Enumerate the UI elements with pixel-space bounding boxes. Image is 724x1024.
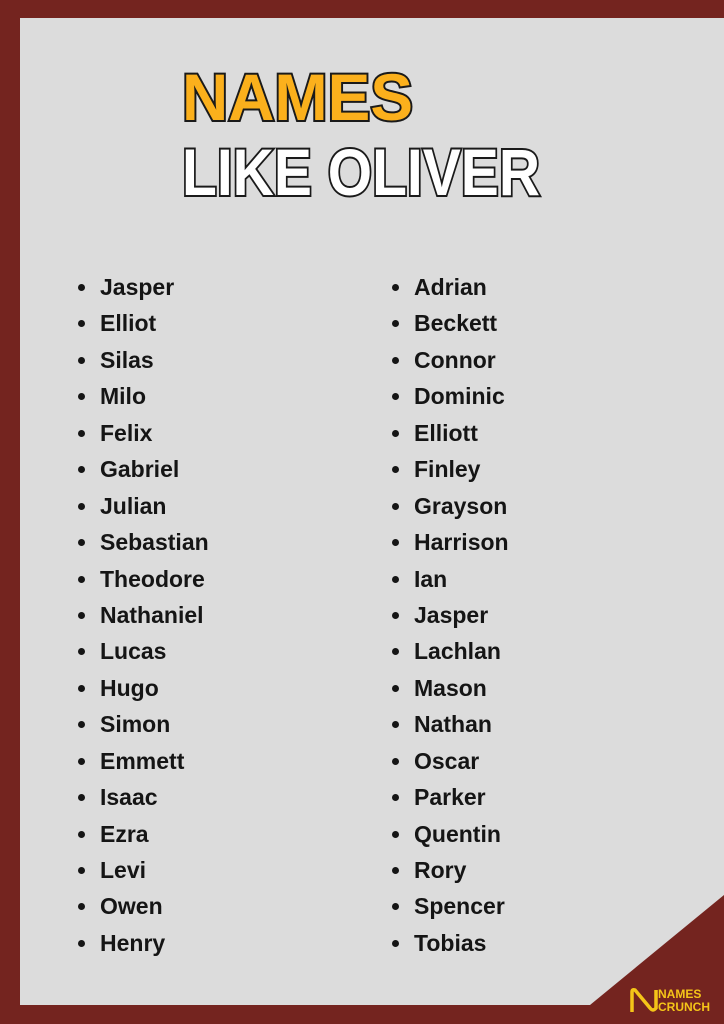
list: column 2: Lachlan <box>414 638 501 664</box>
logo: NAMES <box>658 987 701 1001</box>
list: column 2: Adrian <box>414 274 487 300</box>
list: column 2: Ian <box>414 566 447 592</box>
list: column 2 <box>392 274 509 956</box>
list: column 2: Oscar <box>414 748 479 774</box>
title: NAMES <box>182 60 413 134</box>
list: column 2: Jasper <box>414 602 488 628</box>
list: column 1: Isaac <box>100 784 158 810</box>
list: column 1: Owen <box>100 893 163 919</box>
list: column 2: Nathan <box>414 711 492 737</box>
list: column 1: Henry <box>100 930 165 956</box>
list: column 1: Felix <box>100 420 152 446</box>
list: column 2: Grayson <box>414 493 507 519</box>
logo <box>630 987 710 1014</box>
list: column 2: Elliott <box>414 420 478 446</box>
list: column 2: Finley <box>414 456 480 482</box>
list: column 2: Quentin <box>414 821 501 847</box>
list: column 2: Beckett <box>414 310 497 336</box>
list: column 1: Elliot <box>100 310 156 336</box>
list: column 2: Connor <box>414 347 496 373</box>
list: column 1: Emmett <box>100 748 184 774</box>
list: column 1: Ezra <box>100 821 149 847</box>
list: column 2: Spencer <box>414 893 505 919</box>
list: column 1: Silas <box>100 347 154 373</box>
list: column 1: Theodore <box>100 566 205 592</box>
list: column 1: Milo <box>100 383 146 409</box>
title: LIKE OLIVER <box>182 135 540 209</box>
list: column 2: Tobias <box>414 930 486 956</box>
list: column 1: Gabriel <box>100 456 179 482</box>
list: column 2: Parker <box>414 784 486 810</box>
list: column 1: Jasper <box>100 274 174 300</box>
list: column 1: Julian <box>100 493 166 519</box>
list: column 1: Sebastian <box>100 529 209 555</box>
list: column 1: Hugo <box>100 675 159 701</box>
list: column 2: Harrison <box>414 529 509 555</box>
list: column 1 <box>78 274 209 956</box>
list: column 2: Rory <box>414 857 466 883</box>
title <box>182 60 542 209</box>
list: column 1: Simon <box>100 711 170 737</box>
list: column 2: Mason <box>414 675 487 701</box>
list: column 2: Dominic <box>414 383 505 409</box>
list: column 1: Levi <box>100 857 146 883</box>
logo: CRUNCH <box>658 1000 710 1014</box>
list: column 1: Lucas <box>100 638 166 664</box>
list: column 1: Nathaniel <box>100 602 204 628</box>
